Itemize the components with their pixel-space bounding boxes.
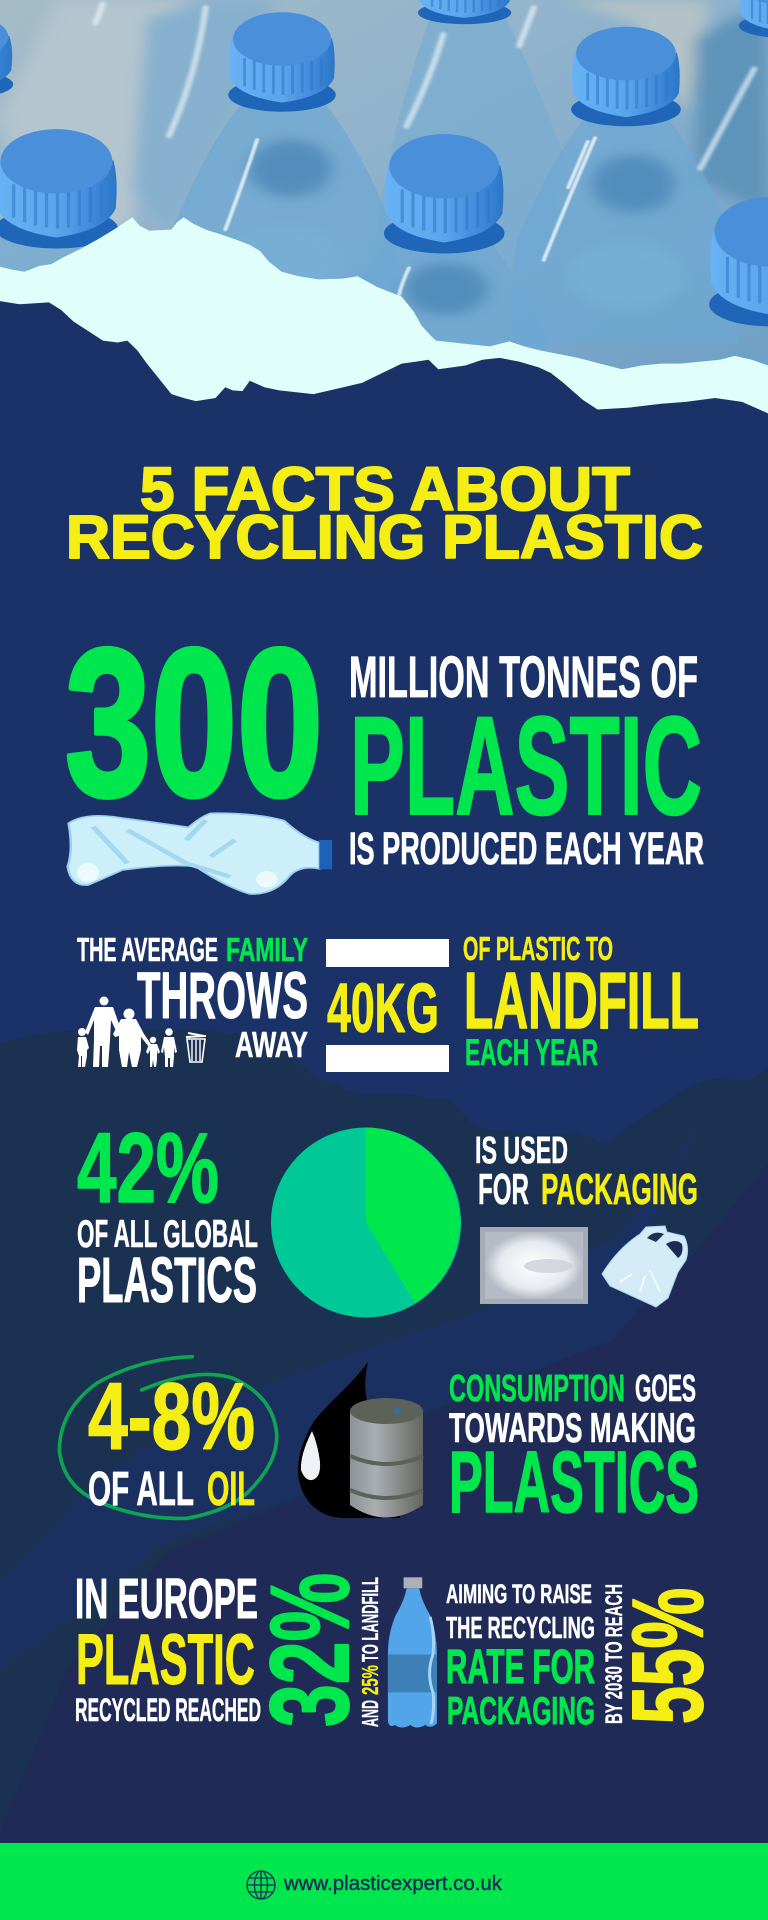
panel: fact 1, 300 million tonnes bbox=[65, 605, 704, 894]
number 4-8%: 4-8% bbox=[88, 1364, 255, 1470]
pie chart: 42 percent bbox=[271, 1128, 461, 1318]
icon: trash can bbox=[186, 1033, 206, 1062]
panel: fact 4, oil consumption bbox=[59, 1357, 699, 1531]
text: for: FOR bbox=[478, 1165, 529, 1214]
number 55% rotated: 55% bbox=[612, 1588, 724, 1724]
bottle caps bbox=[0, 0, 768, 326]
footer bar bbox=[0, 1843, 768, 1920]
text: oil: OIL bbox=[207, 1463, 255, 1516]
text: the average: THE AVERAGE bbox=[77, 931, 218, 968]
text: throws: THROWS bbox=[137, 958, 308, 1032]
text: packaging: PACKAGING bbox=[447, 1690, 595, 1733]
number 300: 300 bbox=[65, 605, 323, 840]
number 40kg: 40KG bbox=[327, 969, 439, 1047]
icon: oil barrel bbox=[350, 1398, 423, 1518]
white bar bottom bbox=[326, 1045, 449, 1072]
text: in europe: IN EUROPE bbox=[75, 1567, 258, 1631]
text: and rotated: AND bbox=[357, 1700, 383, 1727]
text: 25% rotated: 25% bbox=[357, 1665, 383, 1695]
background: blue diagonal band bbox=[0, 1083, 740, 1670]
text: consumption: CONSUMPTION bbox=[449, 1368, 625, 1410]
icon: water bottle bbox=[388, 1577, 437, 1727]
icon: globe bbox=[247, 1871, 275, 1899]
text: the recycling: THE RECYCLING bbox=[446, 1610, 595, 1645]
title bbox=[66, 455, 703, 571]
icon: oil drop bbox=[298, 1362, 400, 1518]
text: of plastic to: OF PLASTIC TO bbox=[463, 930, 613, 967]
text: family: FAMILY bbox=[226, 931, 308, 968]
text: goes: GOES bbox=[635, 1368, 696, 1410]
torn paper edge bbox=[0, 217, 768, 440]
text: plastic: PLASTIC bbox=[76, 1621, 255, 1700]
text: plastics: PLASTICS bbox=[77, 1244, 257, 1316]
text: away: AWAY bbox=[235, 1024, 308, 1065]
background: purple navy lower layer bbox=[0, 1163, 768, 1920]
icon: plastic sachet bbox=[480, 1227, 588, 1304]
background: dark mountain layer bbox=[0, 1030, 768, 1920]
text: rate for: RATE FOR bbox=[446, 1641, 595, 1694]
text: of all: OF ALL bbox=[88, 1463, 194, 1516]
panel: fact 2, 40kg to landfill bbox=[77, 930, 699, 1073]
white bar top bbox=[326, 939, 449, 967]
text: aiming to raise: AIMING TO RAISE bbox=[446, 1579, 592, 1609]
text: recycled reached: RECYCLED REACHED bbox=[75, 1692, 261, 1728]
text: of all global: OF ALL GLOBAL bbox=[77, 1213, 258, 1256]
number 32% rotated: 32% bbox=[248, 1573, 372, 1727]
icon: plastic bag bbox=[602, 1226, 688, 1307]
panel: fact 3, 42 percent packaging bbox=[77, 1112, 698, 1318]
title line 2: RECYCLING PLASTIC bbox=[66, 503, 703, 571]
text: is used: IS USED bbox=[475, 1130, 568, 1172]
panel: fact 5, europe recycling bbox=[75, 1567, 724, 1733]
text: to landfill rotated: TO LANDFILL bbox=[357, 1577, 383, 1662]
text: each year: EACH YEAR bbox=[465, 1032, 598, 1073]
number 42%: 42% bbox=[77, 1112, 219, 1223]
footer url: www.plasticexpert.co.uk bbox=[283, 1873, 503, 1895]
hero photo: plastic bottles bbox=[0, 0, 768, 434]
icon: crushed plastic bottle bbox=[68, 813, 332, 894]
title line 1: 5 FACTS ABOUT bbox=[140, 455, 630, 523]
circled scribble bbox=[59, 1357, 277, 1518]
icon: family silhouette bbox=[77, 996, 177, 1067]
text: by 2030 to reach rotated: BY 2030 TO REACH bbox=[601, 1584, 628, 1724]
back bottle bodies bbox=[0, 15, 740, 434]
navy torn edge bbox=[0, 301, 768, 440]
